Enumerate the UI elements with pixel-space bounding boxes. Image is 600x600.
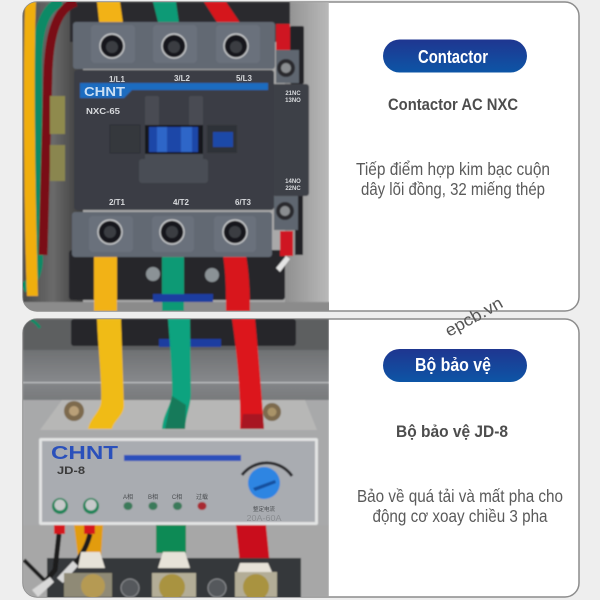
labels printed on contactor: 1/L1: [109, 75, 126, 84]
labels printed on contactor: 4/T2: [173, 198, 190, 207]
labels printed on protector: A相: [123, 493, 133, 501]
protector description: Bảo về quá tải và mất pha cho: [357, 486, 563, 506]
labels printed on protector: JD-8: [57, 465, 85, 477]
protector button: [383, 349, 527, 382]
protector description: [357, 486, 563, 526]
contactor description: dây lõi đồng, 32 miếng thép: [361, 179, 545, 199]
labels printed on protector: CHNT: [51, 443, 118, 463]
panel: contactor: [20, 2, 579, 312]
labels printed on contactor: 3/L2: [174, 74, 191, 83]
labels printed on protector: 过载: [196, 493, 208, 501]
labels printed on contactor: CHNT: [84, 85, 125, 99]
contactor description: [356, 159, 550, 199]
labels printed on protector: 整定电流: [253, 505, 275, 513]
watermark: epcb.vn: [442, 293, 506, 340]
labels printed on contactor: 5/L3: [236, 74, 253, 83]
photo: CHNT NXC-65 contactor: [20, 2, 330, 312]
panel background: contactor: [23, 2, 579, 311]
labels printed on contactor: 6/T3: [235, 198, 252, 207]
labels printed on contactor: 21NC: [285, 91, 301, 97]
contactor button: [383, 40, 527, 72]
protector description: động cơ xoay chiều 3 pha: [372, 506, 548, 526]
protector button: Bộ bảo vệ: [415, 355, 491, 375]
panel background: protector: [23, 319, 579, 597]
labels printed on protector: C相: [172, 493, 182, 501]
protector heading: Bộ bảo vệ JD-8: [396, 422, 508, 441]
labels printed on contactor: [84, 74, 301, 207]
contactor description: Tiếp điểm hợp kim bạc cuộn: [356, 159, 550, 179]
labels printed on protector: [51, 443, 282, 523]
labels printed on contactor: 14NO: [285, 179, 301, 185]
labels printed on contactor: 2/T1: [109, 198, 126, 207]
labels printed on contactor: NXC-65: [86, 107, 121, 116]
labels printed on contactor: 13NO: [285, 98, 301, 104]
labels printed on protector: B相: [148, 493, 158, 501]
contactor button: Contactor: [418, 47, 488, 67]
contactor heading: Contactor AC NXC: [388, 95, 518, 114]
panel: protector: [23, 318, 579, 600]
labels printed on protector: 20A-60A: [246, 514, 282, 523]
labels printed on contactor: 22NC: [285, 186, 301, 192]
photo: CHNT JD-8 protector: [23, 318, 329, 600]
